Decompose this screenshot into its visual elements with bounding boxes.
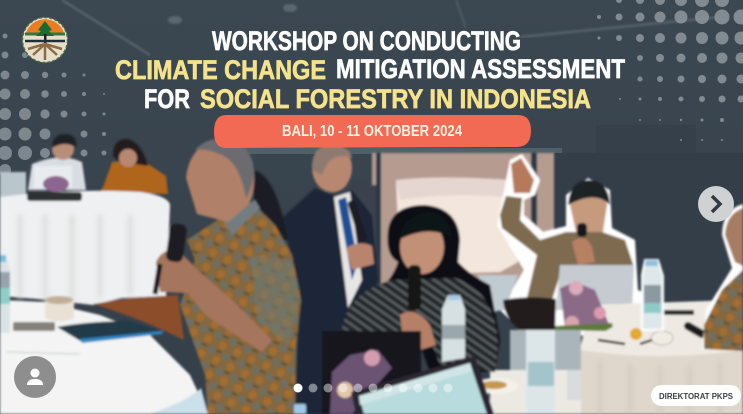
panel: back table with two seated attendees bbox=[0, 134, 168, 198]
dark notepad and clear glass centre bbox=[474, 297, 581, 414]
front left white table bbox=[0, 296, 208, 414]
photo collage of workshop participants bbox=[0, 134, 743, 414]
small bottle cap at bottom centre bbox=[294, 404, 306, 414]
title line 2: MITIGATION ASSESSMENT bbox=[336, 54, 625, 84]
title line 3: FOR bbox=[144, 84, 190, 114]
source badge bbox=[651, 385, 741, 406]
dark chair behind speaker bbox=[250, 170, 288, 240]
person: man in beige blazer with white sticker outline bbox=[478, 154, 660, 340]
person: man in batik shirt speaking bbox=[155, 139, 301, 414]
floral arrangement on right table bbox=[555, 281, 612, 330]
title line 1: WORKSHOP ON CONDUCTING bbox=[212, 26, 521, 56]
floor carpet bbox=[93, 295, 184, 340]
title line 3 highlight: SOCIAL FORESTRY IN INDONESIA bbox=[200, 84, 591, 114]
title line 2 highlight: CLIMATE CHANGE bbox=[115, 55, 326, 85]
front right white table bbox=[581, 300, 743, 414]
left halftone dot pattern bbox=[0, 34, 106, 176]
person: partly visible man at right edge bbox=[702, 204, 743, 351]
back table cloth bbox=[0, 191, 170, 305]
date pill bbox=[214, 115, 531, 148]
water bottle on right table bbox=[642, 260, 663, 330]
date text: BALI, 10 - 11 OKTOBER 2024 bbox=[282, 123, 462, 140]
badge text: DIREKTORAT PKPS bbox=[659, 392, 734, 401]
closed dark laptop front bbox=[322, 331, 421, 414]
panel: flipchart and wall behind bbox=[330, 153, 554, 305]
right halftone dot pattern bbox=[597, 0, 743, 141]
water bottle on left table bbox=[0, 255, 10, 333]
person: woman with microphone in patterned blouse bbox=[342, 205, 500, 372]
title bbox=[115, 26, 625, 114]
icon: ministry logo bbox=[22, 18, 68, 62]
next slide arrow button bbox=[698, 186, 734, 222]
icon: user avatar bbox=[14, 356, 56, 398]
water bottle in front of woman bbox=[442, 295, 465, 362]
carousel pagination dots bbox=[294, 384, 452, 392]
person: man in navy suit bbox=[282, 144, 378, 414]
open laptop foreground bbox=[351, 356, 494, 414]
floral arrangement front bbox=[330, 350, 392, 414]
